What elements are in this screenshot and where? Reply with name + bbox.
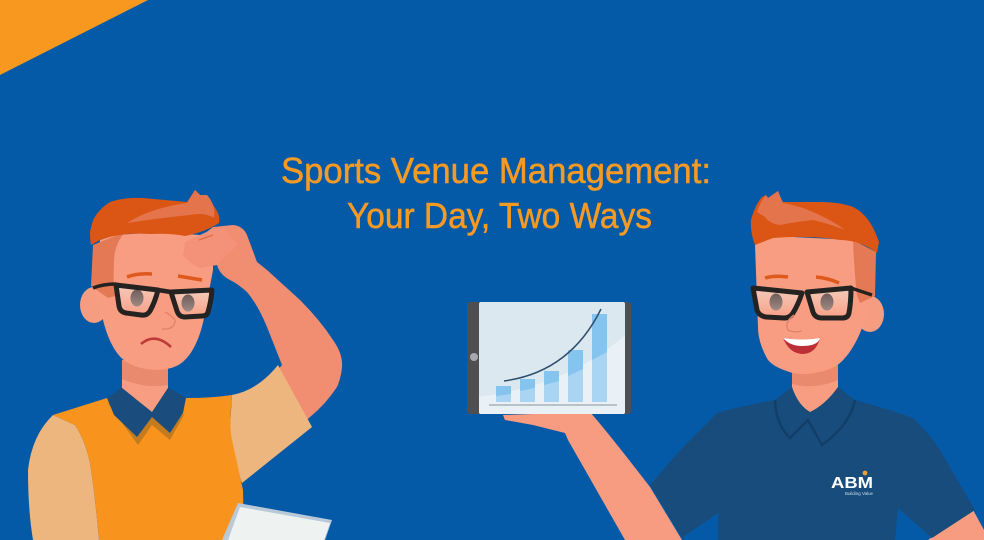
eyebrows <box>127 274 152 277</box>
frown <box>141 339 171 347</box>
ear <box>80 287 108 323</box>
nose <box>162 312 175 329</box>
clipboard <box>222 503 332 540</box>
trend line <box>504 309 601 381</box>
vest <box>53 395 244 540</box>
tablet body <box>467 302 631 414</box>
side hair <box>91 232 125 298</box>
pupils <box>130 290 144 306</box>
lenses <box>116 285 158 315</box>
right arm <box>928 508 984 540</box>
corner triangle <box>0 0 148 75</box>
glasses <box>93 284 212 317</box>
face <box>755 236 875 374</box>
title: Your Day, Two Ways <box>347 195 652 236</box>
character: happy manager with tablet <box>503 191 984 540</box>
logo: ABM <box>831 471 873 496</box>
collar <box>775 400 855 445</box>
tablet screen <box>479 302 625 414</box>
left arm and hand <box>503 412 682 540</box>
hand <box>183 228 238 268</box>
arm <box>184 225 342 440</box>
nose <box>787 315 802 332</box>
logo: ABM: Building Value <box>845 491 873 496</box>
pupils <box>770 294 782 310</box>
axis <box>489 404 617 406</box>
bar chart <box>496 314 607 402</box>
neck <box>122 360 168 412</box>
logo: ABM: ABM <box>831 475 873 492</box>
screen highlight <box>479 335 625 414</box>
shirt <box>650 387 975 540</box>
smile <box>783 338 820 354</box>
title: Sports Venue Management: <box>281 150 711 191</box>
ear <box>856 296 884 332</box>
eyebrows <box>765 276 788 278</box>
right sleeve <box>230 365 312 483</box>
lenses <box>753 288 802 318</box>
face <box>93 232 213 370</box>
side hair <box>853 240 876 303</box>
collar <box>107 402 185 445</box>
title <box>281 150 711 236</box>
home button <box>470 353 478 361</box>
hair <box>90 190 219 245</box>
glasses <box>753 288 872 318</box>
character: stressed manager <box>28 190 342 540</box>
neck <box>792 360 838 412</box>
hair <box>751 191 879 253</box>
left sleeve <box>28 415 99 540</box>
tablet <box>467 302 631 414</box>
